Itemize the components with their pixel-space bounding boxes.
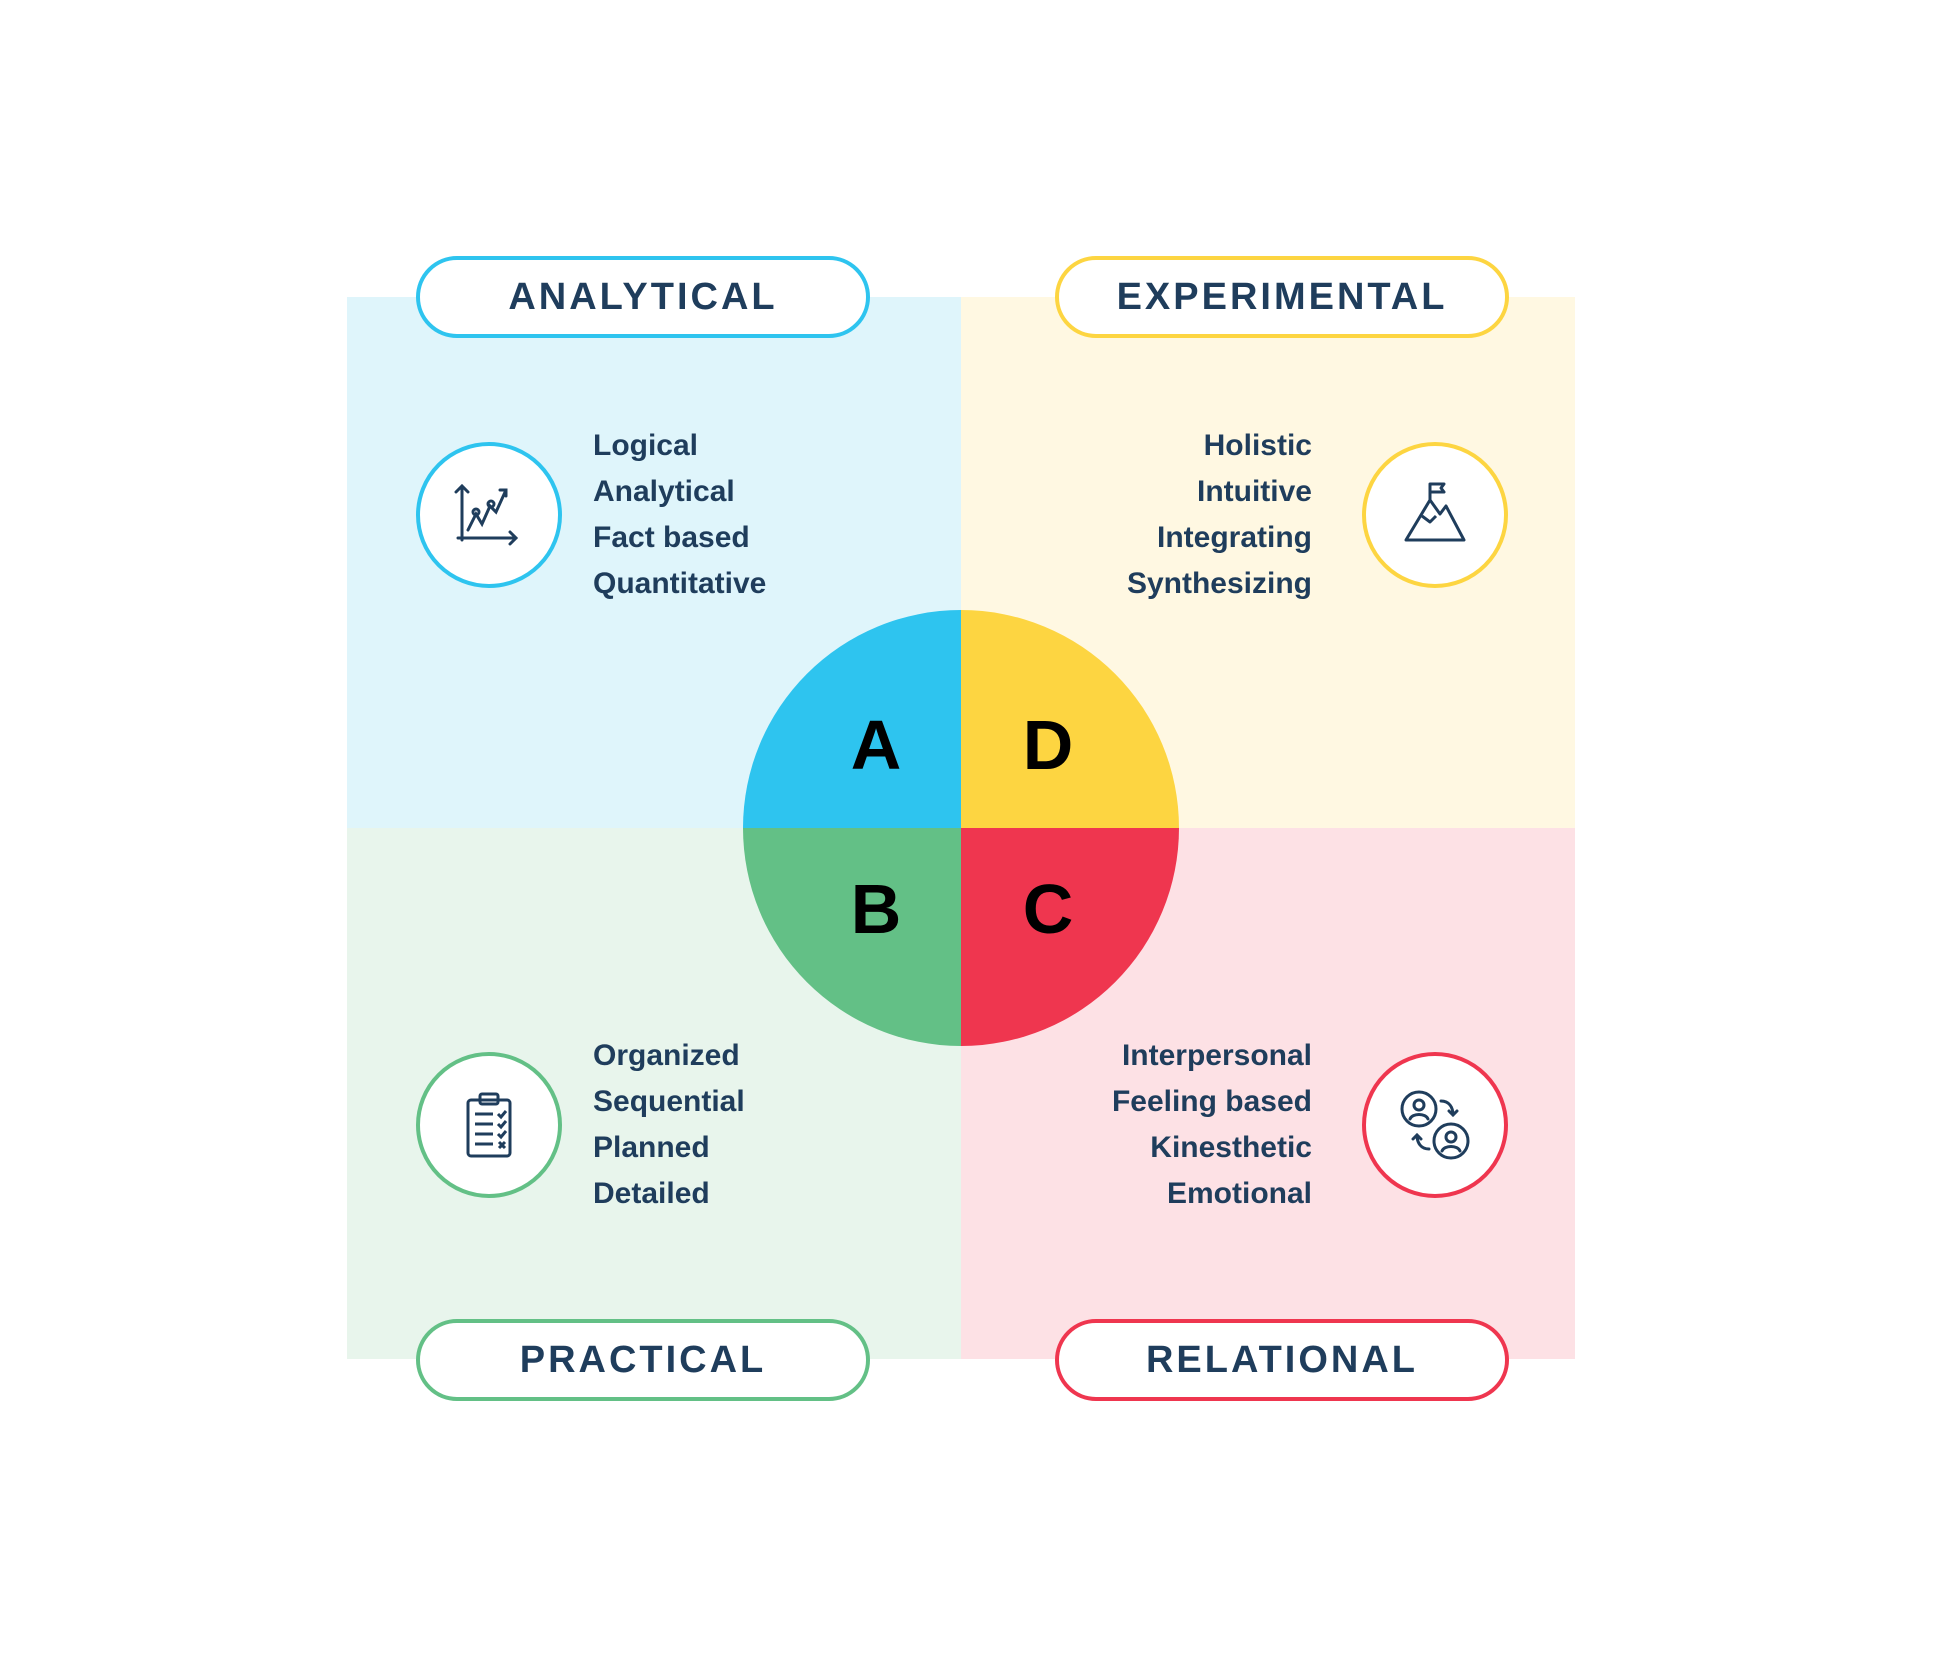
text: analytical traits: Analytical xyxy=(593,475,735,508)
text: practical traits: Sequential xyxy=(593,1085,745,1118)
text: practical traits: Detailed xyxy=(593,1177,710,1210)
icon: mountain flag xyxy=(1362,442,1508,588)
text: practical traits: Organized xyxy=(593,1039,740,1072)
text: analytical traits: Logical xyxy=(593,429,698,462)
text: practical traits xyxy=(593,1039,745,1210)
pill: ANALYTICAL xyxy=(416,256,870,338)
text: analytical traits: Fact based xyxy=(593,521,750,554)
panel: practical background xyxy=(347,828,961,1359)
panel: analytical background xyxy=(347,297,961,828)
pill: RELATIONAL: RELATIONAL xyxy=(1146,1338,1418,1380)
letter B: B xyxy=(851,870,901,948)
text: experimental traits: Synthesizing xyxy=(1127,567,1312,600)
pill: RELATIONAL xyxy=(1055,1319,1509,1401)
text: experimental traits: Holistic xyxy=(1204,429,1312,462)
pill: PRACTICAL: PRACTICAL xyxy=(520,1338,766,1380)
text: experimental traits: Intuitive xyxy=(1197,475,1312,508)
pill: EXPERIMENTAL xyxy=(1055,256,1509,338)
text: relational traits: Kinesthetic xyxy=(1150,1131,1312,1164)
chart: four-quadrant circle xyxy=(743,610,1179,1046)
letter D: D xyxy=(1023,706,1073,784)
text: relational traits xyxy=(1112,1039,1312,1210)
text: analytical traits xyxy=(593,429,766,600)
panel: experimental background xyxy=(961,297,1575,828)
text: practical traits: Planned xyxy=(593,1131,710,1164)
text: relational traits: Emotional xyxy=(1167,1177,1312,1210)
icon: clipboard xyxy=(416,1052,562,1198)
pill: ANALYTICAL: ANALYTICAL xyxy=(508,276,778,318)
text: relational traits: Interpersonal xyxy=(1122,1039,1312,1072)
text: relational traits: Feeling based xyxy=(1112,1085,1312,1118)
letter C: C xyxy=(1023,870,1073,948)
icon: people exchange xyxy=(1362,1052,1508,1198)
text: experimental traits xyxy=(1127,429,1312,600)
letter A: A xyxy=(851,706,901,784)
pill: EXPERIMENTAL: EXPERIMENTAL xyxy=(1117,276,1447,318)
pill: PRACTICAL xyxy=(416,1319,870,1401)
text: analytical traits: Quantitative xyxy=(593,567,766,600)
panel: relational background xyxy=(961,828,1575,1359)
text: experimental traits: Integrating xyxy=(1157,521,1312,554)
icon: chart xyxy=(416,442,562,588)
